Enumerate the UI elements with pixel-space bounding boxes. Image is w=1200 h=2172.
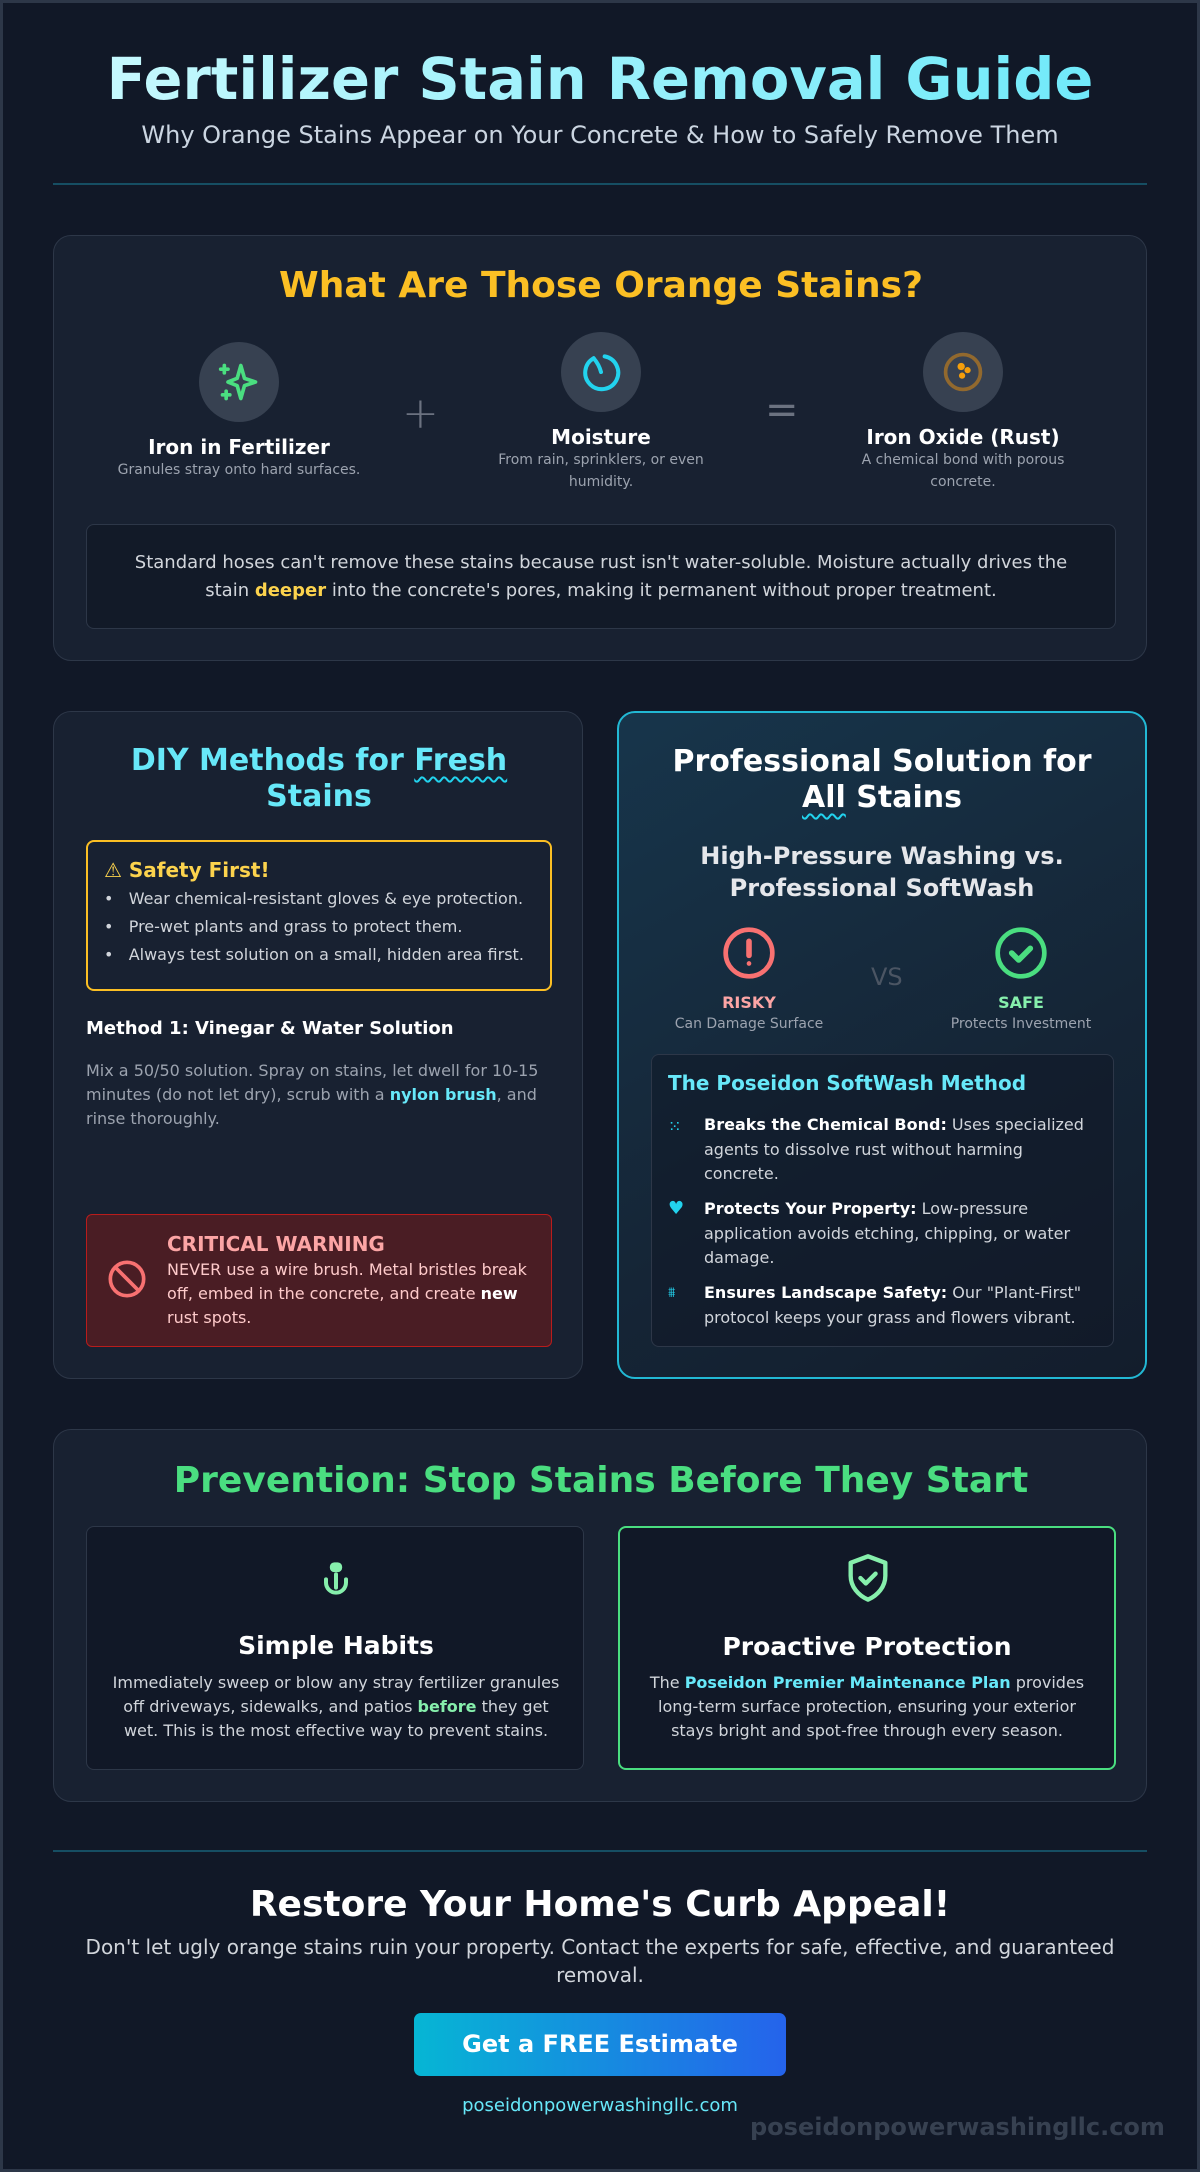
icon: iron sparkle <box>199 342 279 422</box>
heading: All Stains <box>802 780 962 815</box>
panel: DIY methods <box>53 711 583 1379</box>
method 1 text: Mix a 50/50 solution. Spray on stains, let dwell for 10-15 minutes (do not let dry), scrub with a nylon brush, and rinse thoroughly. <box>86 1061 538 1128</box>
label: iron in fertilizer: Iron in Fertilizer <box>148 435 330 459</box>
label: moisture: From rain, sprinklers, or even humidity. <box>498 452 704 490</box>
heading: Prevention: Stop Stains Before They Start <box>174 1460 1028 1501</box>
softwash method box <box>651 1054 1114 1347</box>
comparison: safe <box>951 927 1091 1032</box>
label: iron oxide <box>862 425 1064 490</box>
watermark: poseidonpowerwashingllc.com <box>750 2113 1165 2141</box>
icon: rust <box>923 332 1003 412</box>
safety list <box>104 889 524 964</box>
label: iron oxide: Iron Oxide (Rust) <box>866 425 1060 449</box>
icon: moisture <box>561 332 641 412</box>
panel: professional solution <box>617 711 1147 1379</box>
heading <box>131 743 508 814</box>
comparison: risky <box>675 927 823 1032</box>
cta heading: Restore Your Home's Curb Appeal! <box>250 1884 950 1925</box>
safety list: • Always test solution on a small, hidden area first. <box>104 945 524 964</box>
url: poseidonpowerwashingllc.com <box>462 2095 738 2116</box>
equals: = <box>765 387 799 433</box>
card: proactive protection: The Poseidon Premier Maintenance Plan provides long-term surface protection, ensuring your exterior stays bright and spot-free through every season. <box>650 1673 1084 1740</box>
card: proactive protection: Proactive Protection <box>722 1632 1012 1661</box>
heading: What Are Those Orange Stains? <box>279 265 923 306</box>
subheading: High-Pressure Washing vs. <box>700 842 1064 870</box>
comparison: risky: RISKY <box>722 993 776 1012</box>
heading: Stains <box>266 779 372 814</box>
method 1 heading: Method 1: Vinegar & Water Solution <box>86 1018 454 1039</box>
card: simple habits: Immediately sweep or blow any stray fertilizer granules off driveways, sidewalks, and patios before they get wet. This is the most effective way to prevent stains. <box>113 1673 559 1740</box>
label: iron in fertilizer: Granules stray onto hard surfaces. <box>118 462 360 478</box>
explanation box: Standard hoses can't remove these stains because rust isn't water-soluble. Moisture actually drives the stain deeper into the concrete's pores, making it permanent without proper treatment. <box>135 552 1067 601</box>
icon: shield <box>848 1554 888 1602</box>
softwash method box: The Poseidon SoftWash Method <box>668 1071 1026 1095</box>
icon: broom <box>324 1562 348 1595</box>
panel: prevention <box>53 1429 1147 1802</box>
critical warning <box>86 1214 552 1347</box>
item: protects property: ♥ <box>668 1198 684 1219</box>
item: chemical bond: Breaks the Chemical Bond: Uses specialized agents to dissolve rust without harming concrete. <box>704 1115 1084 1183</box>
icon: no symbol <box>108 1260 146 1298</box>
safety heading: ⚠ Safety First! <box>104 858 270 882</box>
label: moisture: Moisture <box>551 425 651 449</box>
heading: DIY Methods for Fresh <box>131 743 507 778</box>
subtitle: Why Orange Stains Appear on Your Concrete & How to Safely Remove Them <box>141 121 1059 149</box>
comparison: risky: Can Damage Surface <box>675 1016 823 1032</box>
comparison: safe: SAFE <box>998 993 1044 1012</box>
label: iron in fertilizer <box>118 435 360 478</box>
heading <box>672 744 1092 820</box>
subheading: Professional SoftWash <box>730 874 1034 902</box>
item: chemical bond: ⁙ <box>668 1117 681 1136</box>
panel: what are those orange stains <box>53 235 1147 661</box>
safety box <box>86 840 552 991</box>
safety list: • Pre-wet plants and grass to protect them. <box>104 917 462 936</box>
safety list: • Wear chemical-resistant gloves & eye protection. <box>104 889 523 908</box>
comparison: safe: Protects Investment <box>951 1016 1091 1032</box>
label: iron oxide: A chemical bond with porous concrete. <box>862 452 1064 490</box>
item: landscape: Ensures Landscape Safety: Our "Plant-First" protocol keeps your grass and flowers vibrant. <box>704 1283 1081 1326</box>
cta button: Get a FREE Estimate <box>462 2030 738 2058</box>
critical warning: NEVER use a wire brush. Metal bristles break off, embed in the concrete, and create new rust spots. <box>167 1260 527 1327</box>
explanation box <box>86 524 1116 629</box>
subheading <box>700 842 1064 902</box>
item: protects property: Protects Your Property: Low-pressure application avoids etching, chipping, or water damage. <box>704 1199 1070 1267</box>
critical warning: CRITICAL WARNING <box>167 1232 385 1256</box>
card: proactive protection <box>618 1526 1116 1770</box>
card: simple habits: Simple Habits <box>238 1631 434 1660</box>
heading: Professional Solution for <box>672 744 1092 779</box>
plus: + <box>402 388 439 439</box>
label: moisture <box>498 425 704 490</box>
title: Fertilizer Stain Removal Guide <box>107 46 1093 113</box>
card: simple habits <box>86 1526 584 1770</box>
item: landscape: ⩩ <box>668 1285 675 1301</box>
vs: VS <box>871 963 903 991</box>
cta button <box>414 2013 786 2076</box>
cta text: Don't let ugly orange stains ruin your property. Contact the experts for safe, effective, and guaranteed removal. <box>86 1935 1114 1987</box>
